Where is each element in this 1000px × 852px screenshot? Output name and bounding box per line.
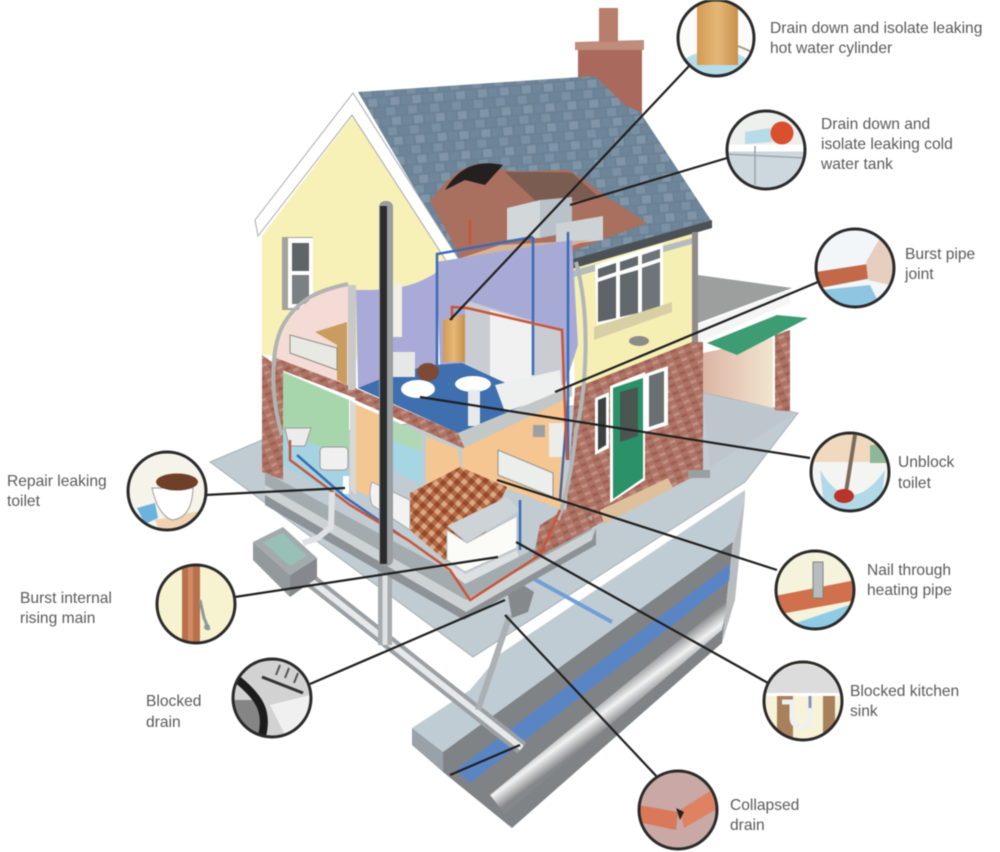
leader line: [450, 65, 690, 320]
label: Drain down and isolate leaking: [770, 20, 982, 37]
roof: [358, 76, 712, 292]
gable fascia: [255, 93, 477, 293]
lower toilet and basin: [285, 428, 349, 494]
icon: burst internal rising main: [157, 562, 235, 646]
upper floor lavender walls: [356, 240, 578, 388]
label: isolate leaking cold: [821, 136, 953, 153]
upstairs basin: [455, 376, 491, 426]
ground floor window: [595, 366, 668, 455]
label: drain: [146, 714, 181, 731]
callout: repair leaking toilet: [7, 452, 345, 532]
outdoor gully box: [253, 527, 317, 597]
wall lamp: [629, 336, 649, 346]
label: Unblock: [898, 454, 955, 471]
callout: cold water tank: [570, 111, 953, 205]
label: Repair leaking: [7, 473, 107, 490]
icon: collapsed drain: [638, 771, 718, 849]
callout: unblock toilet: [420, 397, 955, 515]
gutter: [470, 220, 712, 298]
garage: [698, 275, 808, 467]
kitchen units: [447, 497, 520, 584]
label: Burst pipe: [905, 246, 975, 263]
label: Blocked: [146, 693, 201, 710]
icon: unblock toilet: [810, 432, 890, 515]
upper floor bedroom: [275, 284, 356, 398]
label: sink: [850, 703, 878, 720]
left brick wall: [262, 355, 283, 480]
label: Burst internal: [20, 590, 112, 607]
downpipe and brick column: [692, 232, 698, 342]
right front wall: [470, 232, 692, 388]
callout: blocked kitchen sink: [516, 542, 959, 740]
leader line: [235, 557, 498, 597]
label: water tank: [820, 156, 893, 173]
leader line: [420, 397, 810, 458]
main sewer marker line: [450, 745, 520, 775]
soil stack: [379, 201, 393, 566]
inspection gully: [507, 583, 534, 618]
ground floor ceiling edge: [458, 386, 572, 449]
water service pipe: [525, 555, 612, 622]
thermostat: [533, 425, 545, 437]
leader line: [555, 282, 818, 392]
left window: [282, 237, 313, 310]
drain pipes: [300, 560, 522, 748]
icon: repair leaking toilet: [128, 452, 206, 532]
leader line: [497, 480, 777, 570]
bath: [370, 482, 410, 530]
label: hot water cylinder: [770, 40, 892, 57]
cutaway outline: [273, 284, 348, 435]
icon: hot water cylinder: [678, 0, 754, 79]
callout: blocked drain: [146, 600, 505, 740]
boiler: [549, 423, 564, 457]
street cutaway block: [412, 490, 745, 828]
attic cutaway: [430, 163, 647, 287]
label: Collapsed: [730, 797, 799, 814]
green door: [610, 372, 645, 503]
ground slab: [210, 392, 798, 657]
doorstep: [600, 478, 673, 524]
hot water pipes: [290, 220, 567, 600]
callout: nail through heating pipe: [497, 480, 952, 632]
label: toilet: [898, 475, 932, 492]
callout: burst internal rising main: [20, 557, 498, 646]
icon: burst pipe joint: [816, 229, 900, 312]
upper right window: [594, 243, 672, 340]
house plinth: [265, 472, 596, 620]
lower left green room: [283, 372, 349, 505]
label: Nail through: [867, 562, 951, 579]
label: joint: [904, 266, 934, 283]
chimney: [575, 8, 644, 115]
icon: nail through heating pipe: [775, 551, 856, 632]
leader line: [505, 615, 660, 780]
label: toilet: [7, 493, 41, 510]
house illustration: [210, 8, 808, 828]
label: rising main: [20, 610, 95, 627]
callout: burst pipe joint: [555, 229, 975, 392]
icon: cold water tank: [725, 111, 810, 195]
leader line: [516, 542, 768, 683]
callout: collapsed drain: [505, 615, 799, 849]
shower tray: [495, 370, 562, 412]
brick skirt: [533, 505, 597, 560]
hall and kitchen walls: [350, 398, 568, 510]
icon: blocked drain: [233, 659, 311, 740]
upstairs toilet: [393, 352, 439, 398]
label: Drain down and: [821, 116, 930, 133]
cold water pipes: [297, 232, 568, 550]
label: heating pipe: [867, 582, 952, 599]
leader line: [570, 158, 727, 205]
post base: [688, 470, 710, 478]
label: Blocked kitchen: [850, 683, 959, 700]
waste pipe from toilet: [303, 492, 332, 543]
brick front wall: [565, 342, 703, 530]
radiator: [498, 450, 553, 497]
label: drain: [730, 817, 765, 834]
callout: hot water cylinder: [450, 0, 982, 320]
left gable wall: [262, 115, 470, 360]
bathroom tiles: [465, 300, 562, 392]
chequered kitchen floor: [410, 467, 507, 565]
bathroom floor: [358, 363, 556, 433]
leader line: [310, 600, 505, 684]
hot water cylinder: [443, 314, 465, 362]
icon: blocked kitchen sink: [764, 662, 842, 740]
leader line: [205, 488, 345, 495]
